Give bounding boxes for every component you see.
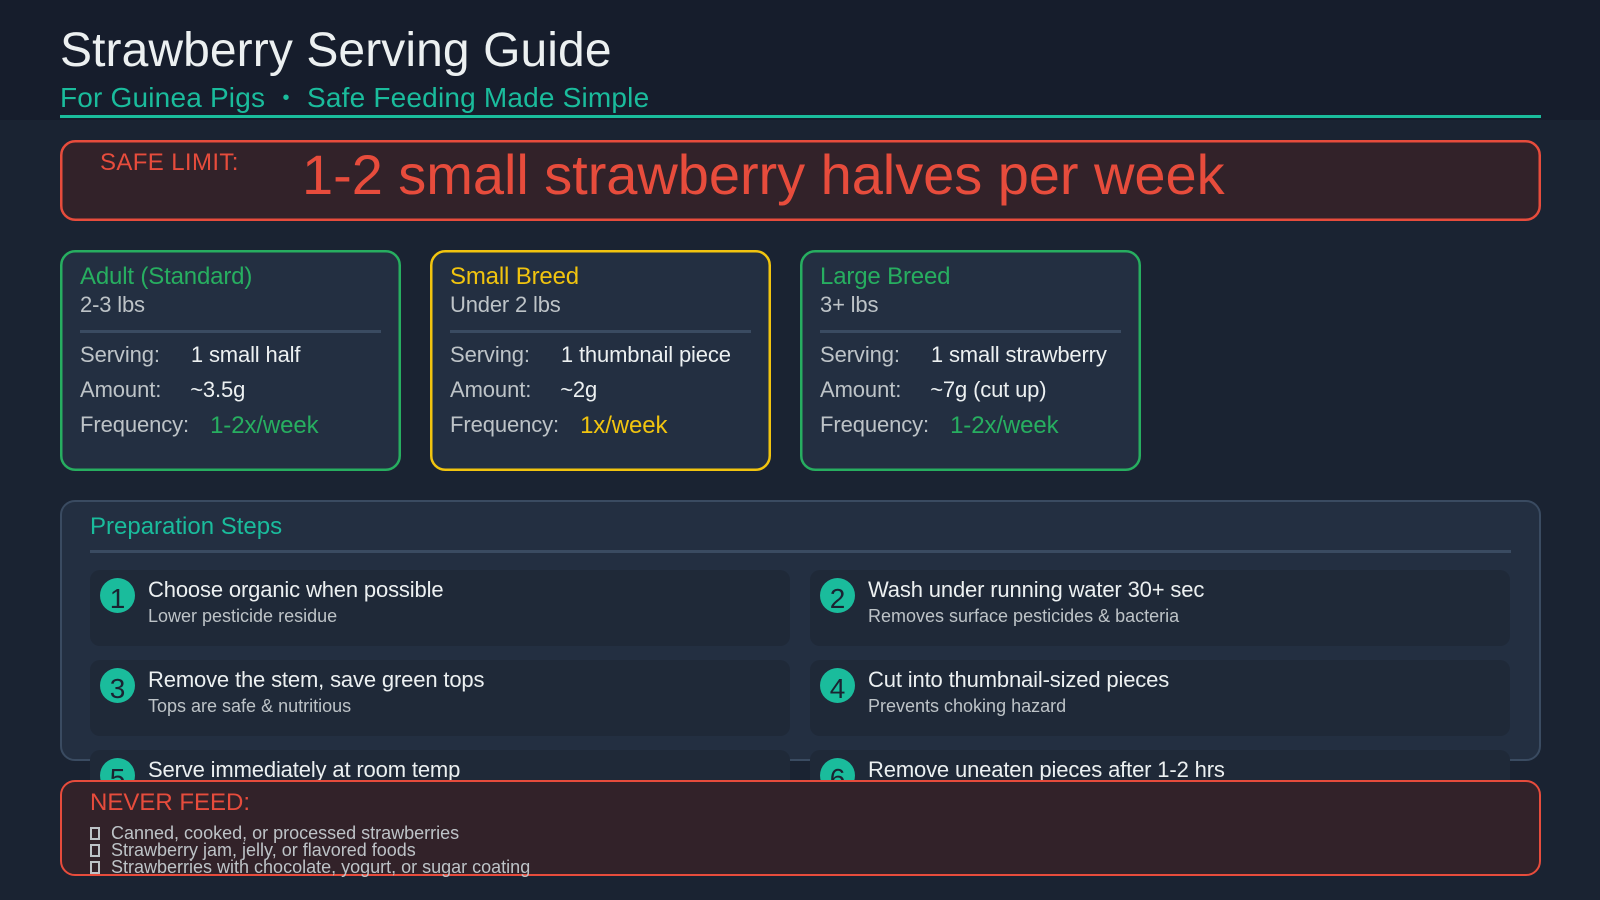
- step title: Remove uneaten pieces after 1-2 hrs: [868, 757, 1225, 782]
- step 6: [810, 750, 1510, 826]
- step number: [820, 758, 855, 793]
- step 5: [90, 750, 790, 826]
- step 1: [90, 570, 790, 646]
- step number: [100, 668, 135, 703]
- step title: Remove the stem, save green tops: [148, 667, 484, 692]
- step number: 3: [110, 673, 125, 704]
- step number: [820, 668, 855, 703]
- card: small breed: [430, 250, 771, 471]
- step number: 2: [830, 583, 845, 614]
- step title: Choose organic when possible: [148, 577, 443, 602]
- step title: Wash under running water 30+ sec: [868, 577, 1204, 602]
- serving row: Serving: 1 small strawberry: [820, 342, 1107, 367]
- step title: Cut into thumbnail-sized pieces: [868, 667, 1169, 692]
- step title: Serve immediately at room temp: [148, 757, 460, 782]
- weight: Under 2 lbs: [450, 292, 561, 317]
- step detail: Tops are safe & nutritious: [148, 696, 351, 716]
- safe limit value: 1-2 small strawberry halves per week: [302, 143, 1225, 206]
- step detail: Lower pesticide residue: [148, 606, 337, 626]
- panel: never feed: [60, 780, 1541, 876]
- frequency row: Frequency: 1x/week: [450, 412, 667, 439]
- never item 1: Canned, cooked, or processed strawberries: [111, 823, 459, 843]
- amount row: Amount: ~7g (cut up): [820, 377, 1046, 402]
- step number: 5: [110, 763, 125, 794]
- weight: 3+ lbs: [820, 292, 878, 317]
- step detail: Removes surface pesticides & bacteria: [868, 606, 1179, 626]
- card title: Adult (Standard): [80, 263, 252, 290]
- subtitle: For Guinea Pigs • Safe Feeding Made Simple: [60, 82, 649, 113]
- step number: [100, 758, 135, 793]
- step number: 1: [110, 583, 125, 614]
- safe limit label: SAFE LIMIT:: [100, 149, 239, 176]
- step number: 4: [830, 673, 845, 704]
- step 4: [810, 660, 1510, 736]
- step number: [820, 578, 855, 613]
- serving row: Serving: 1 small half: [80, 342, 300, 367]
- card: adult standard: [60, 250, 401, 471]
- title: Strawberry Serving Guide: [60, 24, 612, 77]
- card title: Small Breed: [450, 263, 579, 290]
- step number: [100, 578, 135, 613]
- never item 3: Strawberries with chocolate, yogurt, or sugar coating: [111, 857, 530, 877]
- header rule: [60, 115, 1541, 118]
- serving row: Serving: 1 thumbnail piece: [450, 342, 731, 367]
- step 3: [90, 660, 790, 736]
- amount row: Amount: ~2g: [450, 377, 597, 402]
- frequency row: Frequency: 1-2x/week: [820, 412, 1059, 439]
- step number: 6: [830, 763, 845, 794]
- weight: 2-3 lbs: [80, 292, 145, 317]
- never feed heading: NEVER FEED:: [90, 789, 250, 816]
- safe limit banner: [60, 140, 1541, 221]
- card: large breed: [800, 250, 1141, 471]
- step 2: [810, 570, 1510, 646]
- panel: preparation steps: [60, 500, 1541, 761]
- amount row: Amount: ~3.5g: [80, 377, 245, 402]
- panel heading: Preparation Steps: [90, 513, 282, 540]
- frequency row: Frequency: 1-2x/week: [80, 412, 319, 439]
- header band: [0, 0, 1600, 120]
- step detail: Prevents choking hazard: [868, 696, 1066, 716]
- card title: Large Breed: [820, 263, 950, 290]
- never item 2: Strawberry jam, jelly, or flavored foods: [111, 840, 416, 860]
